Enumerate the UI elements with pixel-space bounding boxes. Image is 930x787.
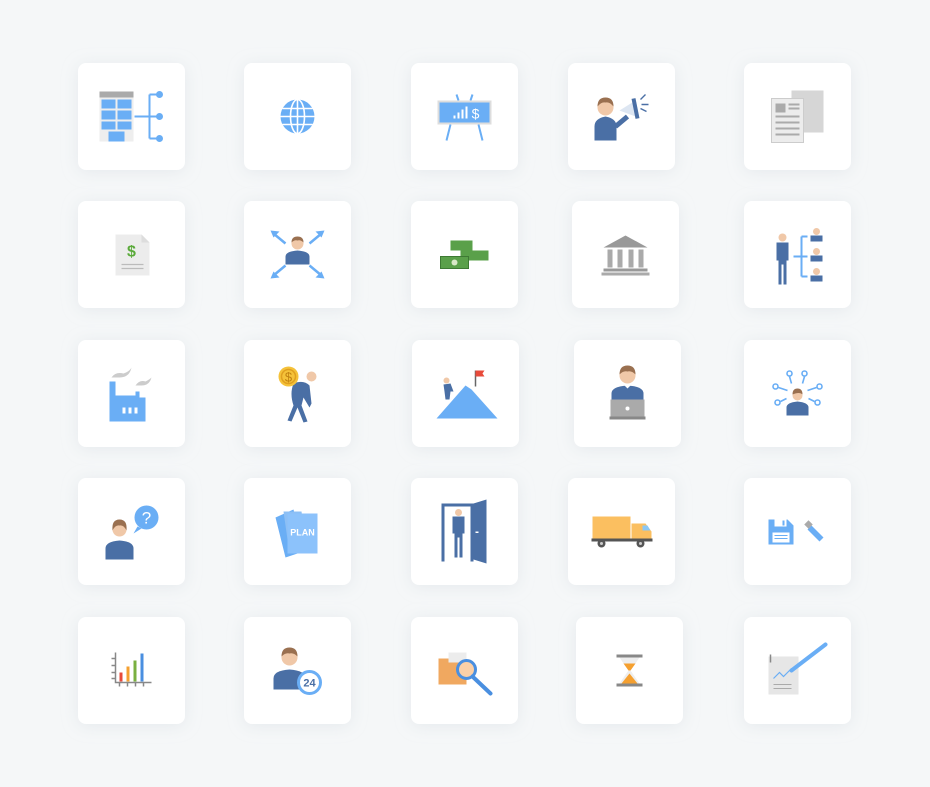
card: globe	[244, 63, 351, 170]
card: folder search	[411, 617, 518, 724]
card: man 24h	[244, 617, 351, 724]
card: man with coin	[244, 340, 351, 447]
card: man with arrows	[244, 201, 351, 308]
card: factory	[78, 340, 185, 447]
card: man with network	[744, 340, 851, 447]
card: building hierarchy	[78, 63, 185, 170]
card: plan folders	[244, 478, 351, 585]
card: woman with question	[78, 478, 185, 585]
card: team hierarchy	[744, 201, 851, 308]
card: floppy and usb	[744, 478, 851, 585]
card: money stacks	[411, 201, 518, 308]
card: document with pen	[744, 617, 851, 724]
card: invoice: $	[127, 244, 136, 260]
card: newspapers	[744, 63, 851, 170]
card: presentation board	[411, 63, 518, 170]
card: invoice	[78, 201, 185, 308]
card: presentation board: $	[472, 106, 480, 122]
card: plan folders: PLAN	[290, 528, 315, 538]
card: man with coin: $	[285, 370, 293, 384]
card: man 24h: 24	[303, 678, 316, 690]
card: mountain climb	[412, 340, 519, 447]
card: man with megaphone	[568, 63, 675, 170]
card: man in doorway	[411, 478, 518, 585]
card: bar chart	[78, 617, 185, 724]
card: truck	[568, 478, 675, 585]
card: hourglass	[576, 617, 683, 724]
card: man with laptop	[574, 340, 681, 447]
card: woman with question: ?	[142, 508, 151, 528]
card: bank	[572, 201, 679, 308]
